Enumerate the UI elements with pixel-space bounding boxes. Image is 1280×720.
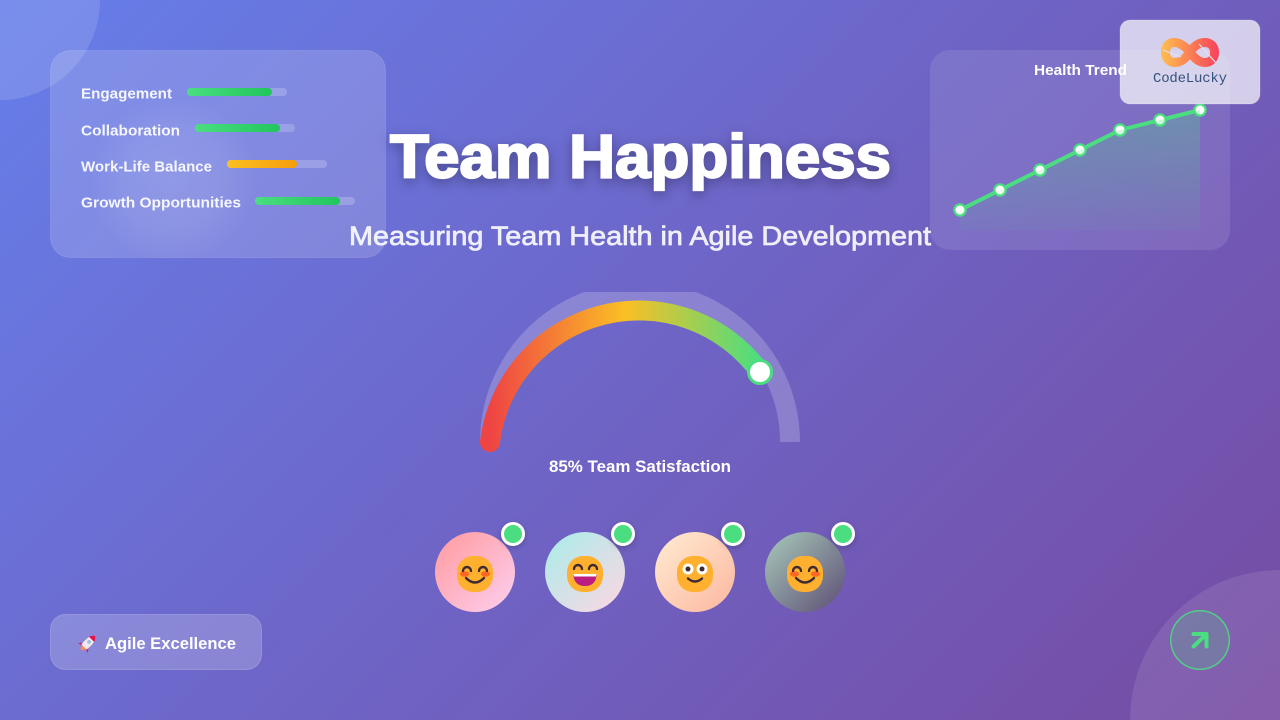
- status dot: [502, 524, 524, 544]
- status dot: [722, 524, 744, 544]
- panel: health trend: [930, 50, 1230, 250]
- gauge knob: [748, 360, 772, 384]
- title: Team Happiness: [390, 122, 891, 190]
- avatar 3: [655, 524, 744, 612]
- avatar 2: [545, 524, 634, 612]
- gauge label: 85% Team Satisfaction: [549, 457, 731, 476]
- logo wordmark: CodeLucky: [1153, 71, 1227, 87]
- logo: CodeLucky: [1120, 20, 1260, 104]
- team avatars: [435, 524, 854, 612]
- emoji: smiling face: [457, 556, 493, 592]
- emoji: smiling face: [787, 556, 823, 592]
- metric: engagement: [81, 86, 287, 102]
- avatar 1: [435, 524, 524, 612]
- icon: infinity mark: [1163, 42, 1216, 63]
- avatar 4: [765, 524, 854, 612]
- decorative circle: bottom right: [1130, 570, 1280, 720]
- metric: collaboration: [81, 122, 295, 140]
- status dot: [612, 524, 634, 544]
- decorative circle: top left: [0, 0, 100, 100]
- panel: team metrics: [50, 50, 386, 265]
- icon: trend arrow: [1171, 611, 1229, 669]
- gauge track: [490, 292, 790, 442]
- gauge value arc: [490, 310, 760, 442]
- line chart: [954, 104, 1206, 230]
- emoji: grinning face: [567, 556, 603, 592]
- metric: collaboration: Collaboration: [81, 122, 180, 140]
- icon: rocket: [76, 631, 100, 655]
- metric: growth opportunities: [81, 194, 355, 212]
- status dot: [832, 524, 854, 544]
- metric: work-life balance: Work-Life Balance: [81, 158, 212, 176]
- chart title: Health Trend: [1034, 62, 1127, 79]
- metric: engagement: Engagement: [81, 86, 172, 102]
- badge label: Agile Excellence: [105, 634, 236, 653]
- emoji: wide-eyed smile: [677, 556, 713, 592]
- subtitle: Measuring Team Health in Agile Development: [349, 221, 932, 251]
- metric: growth opportunities: Growth Opportunities: [81, 194, 241, 212]
- badge: agile excellence: [50, 614, 262, 670]
- metric: work-life balance: [81, 158, 327, 176]
- gauge: team satisfaction: [490, 292, 790, 476]
